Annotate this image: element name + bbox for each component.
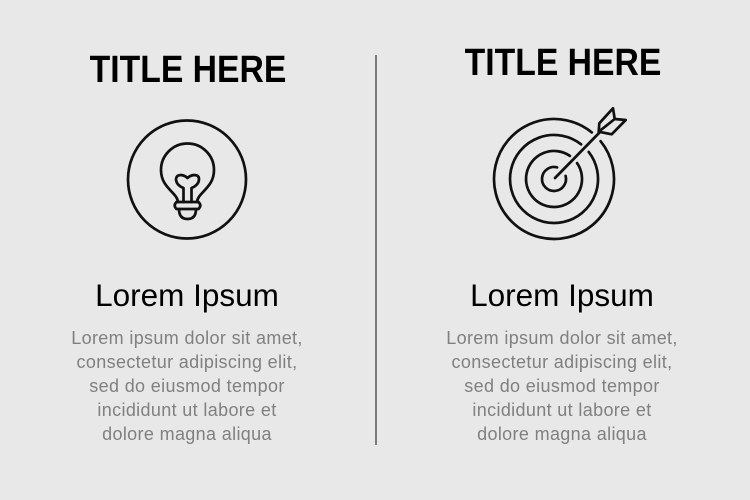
body text left: consectetur adipiscing elit, [77, 352, 297, 372]
body text left: Lorem ipsum dolor sit amet, [71, 328, 303, 348]
body text left [71, 328, 303, 444]
body text right: incididunt ut labore et [472, 400, 652, 420]
body text right [446, 328, 678, 444]
body text left: dolore magna aliqua [102, 424, 272, 444]
body text left: sed do eiusmod tempor [89, 376, 285, 396]
center divider [375, 55, 377, 445]
body text right: consectetur adipiscing elit, [452, 352, 672, 372]
title right: TITLE HERE [465, 42, 661, 84]
body text right: sed do eiusmod tempor [464, 376, 660, 396]
heading right: Lorem Ipsum [470, 277, 654, 313]
title left: TITLE HERE [90, 49, 286, 91]
body text right: dolore magna aliqua [477, 424, 647, 444]
body text right: Lorem ipsum dolor sit amet, [446, 328, 678, 348]
body text left: incididunt ut labore et [97, 400, 277, 420]
heading left: Lorem Ipsum [95, 277, 279, 313]
